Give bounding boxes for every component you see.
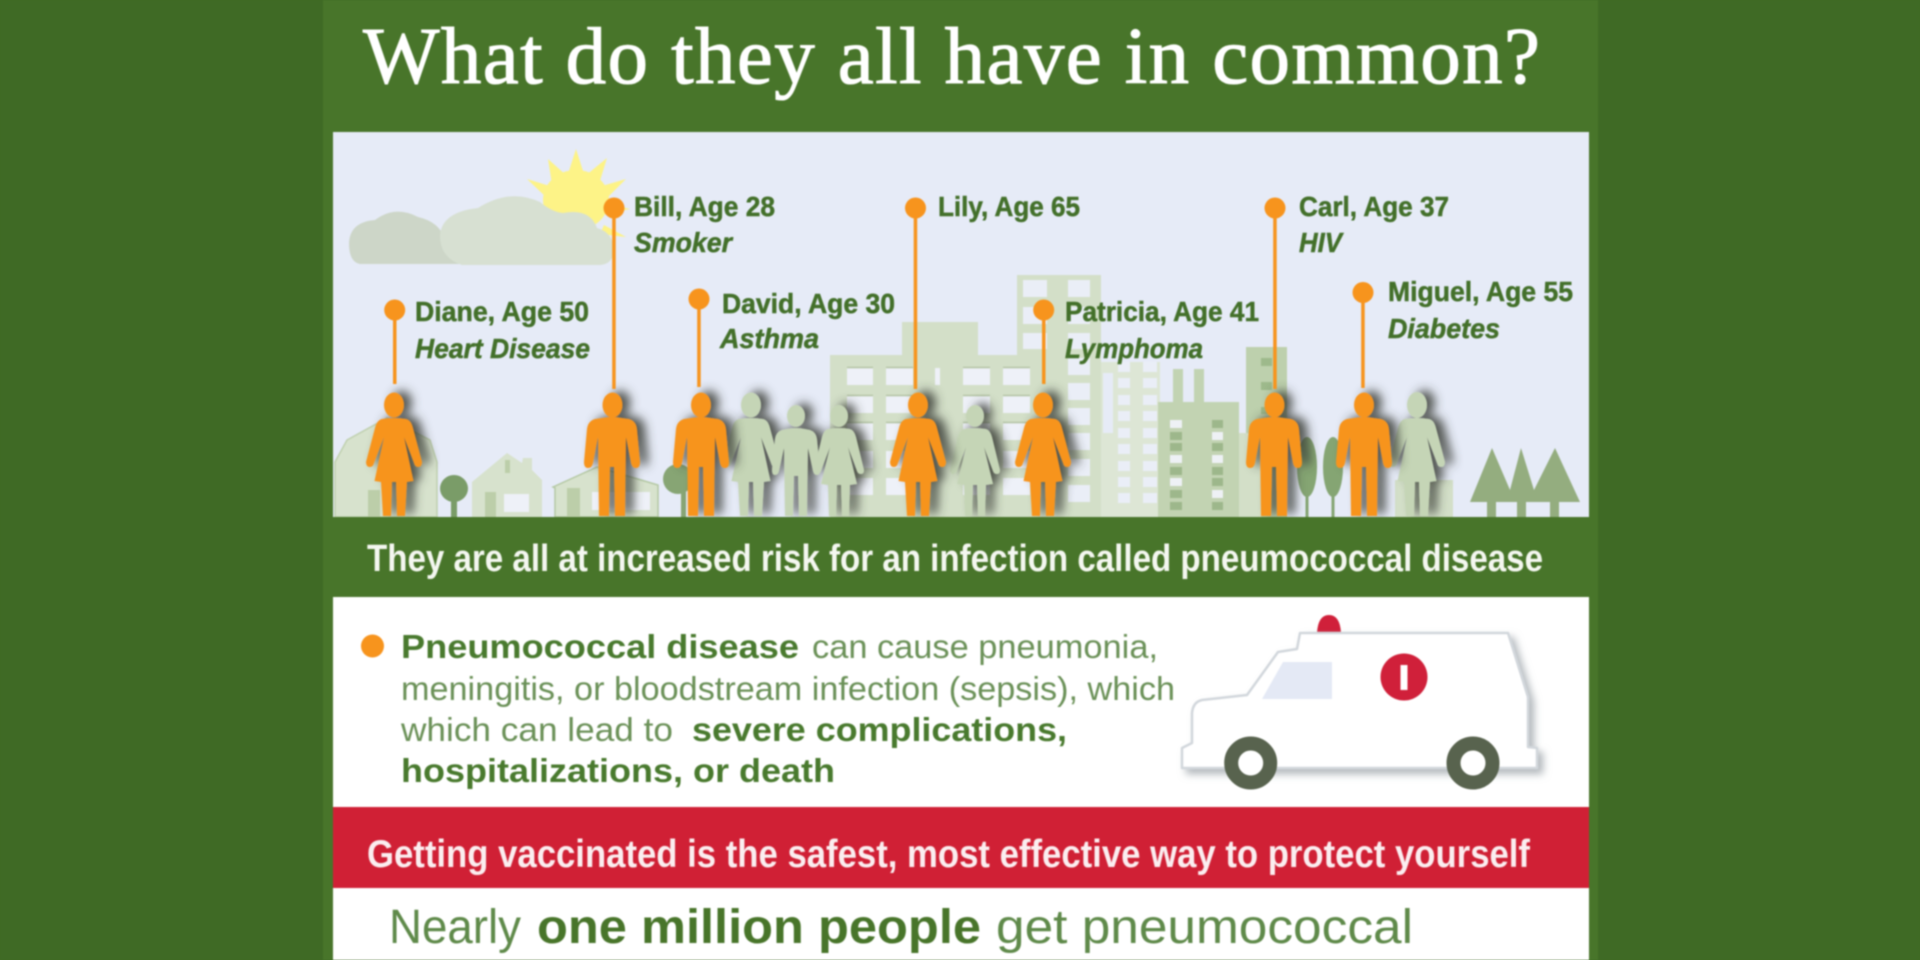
text block: disease description: meningitis, or bloodstream infection (sepsis), which [401,670,1175,707]
callout: Bill: Smoker [634,227,734,258]
callout: Carl: HIV [1299,227,1344,258]
person: Diane [366,392,422,516]
callout: David: David, Age 30 [722,288,895,319]
risk heading band: They are all at increased risk for an infection called pneumococcal disease [367,538,1543,580]
callout: Patricia [1033,296,1259,384]
person: Miguel [1336,392,1392,516]
text block: statistic: one million people [537,901,981,954]
text block: disease description: can cause pneumonia, [812,628,1158,665]
panel: statistic [333,888,1589,960]
person: Patricia [1015,392,1071,516]
text block: disease description: which can lead to [400,711,673,748]
text block: disease description [400,628,1175,789]
infographic column [323,0,1598,960]
callout: Miguel [1352,276,1573,388]
icon: clouds [349,196,614,265]
title: What do they all have in common? [363,11,1540,101]
callout: Bill [604,191,775,389]
callout: Patricia: Lymphoma [1065,333,1203,364]
callout: Lily: Lily, Age 65 [938,191,1080,222]
callout: Diane: Heart Disease [415,333,590,364]
callout: David: Asthma [719,323,819,354]
callout: Patricia: Patricia, Age 41 [1065,296,1259,327]
text block: disease description: severe complications, [692,711,1067,748]
panel: disease information [333,597,1589,807]
icon: sun [527,149,630,237]
callout: Diane [384,296,590,384]
sky [333,132,1589,517]
banner: vaccination message: Getting vaccinated is the safest, most effective way to protect yourself [367,833,1531,876]
person: Carl [1246,392,1302,516]
person: Lily [890,392,946,516]
callout: Miguel: Miguel, Age 55 [1388,276,1573,307]
banner: vaccination message [333,807,1589,888]
text block: disease description: Pneumococcal disease [401,628,799,665]
houses [335,418,658,517]
panel: city scene [333,132,1589,517]
text block: statistic: Nearly [389,901,521,954]
callout: David [688,288,895,387]
text block: statistic [389,901,1413,954]
crowd: green figures [723,392,1445,516]
callout: Bill: Bill, Age 28 [634,191,775,222]
person: David [673,392,729,516]
callout: Miguel: Diabetes [1388,313,1500,344]
callout: Carl [1264,191,1449,389]
trees [440,437,1580,517]
callout: Diane: Diane, Age 50 [415,296,589,327]
callout: Carl: Carl, Age 37 [1299,191,1449,222]
icon: bullet [361,634,384,658]
icon: ambulance [1182,615,1537,782]
text block: disease description: hospitalizations, or death [401,752,835,789]
callout: Lily [905,191,1080,389]
buildings [830,275,1453,517]
person: Bill [584,392,640,516]
text block: statistic: get pneumococcal [996,901,1413,954]
